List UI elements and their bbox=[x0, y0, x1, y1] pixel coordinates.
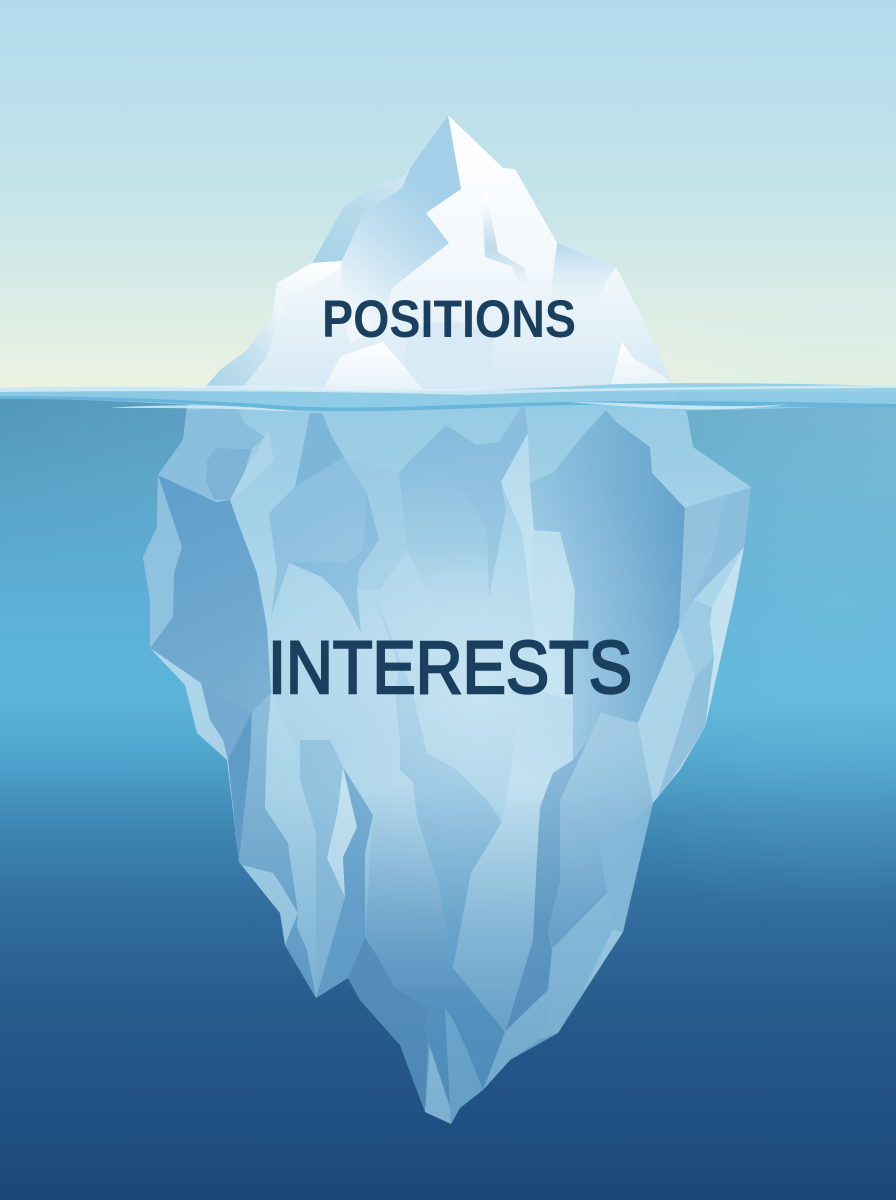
lower center and point facets bbox=[344, 704, 653, 1124]
water surface waves bbox=[0, 383, 896, 412]
upper left facets bbox=[143, 407, 344, 760]
right facets bbox=[530, 410, 751, 803]
central facets bbox=[269, 408, 575, 700]
sky background bbox=[0, 0, 896, 400]
ocean water bbox=[0, 300, 896, 1200]
submerged iceberg bbox=[140, 390, 760, 1130]
heading: INTERESTS: INTERESTS bbox=[268, 626, 632, 709]
lower left spikes bbox=[228, 693, 373, 998]
iceberg tip above water bbox=[200, 115, 677, 395]
heading: POSITIONS: POSITIONS bbox=[322, 290, 576, 349]
